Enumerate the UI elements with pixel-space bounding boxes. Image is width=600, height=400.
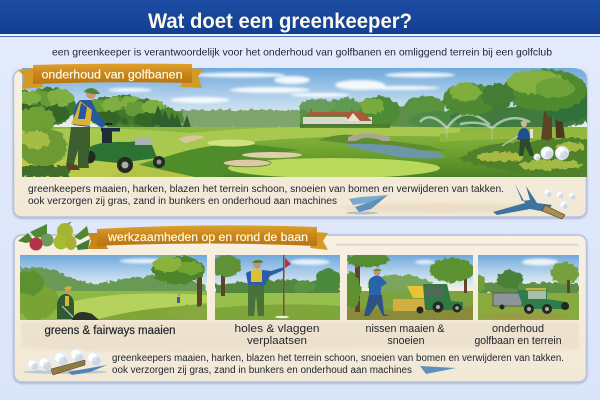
- clubhouse: [303, 109, 372, 124]
- right-hand trees: [442, 69, 594, 141]
- caption: ditches: snoeien: [388, 335, 424, 347]
- ribbon: werkzaamheden: [88, 225, 328, 250]
- fairways: [22, 126, 590, 178]
- utility vehicle with trailer: [493, 288, 569, 314]
- figure: [246, 260, 284, 316]
- caption: holes and flags: [234, 323, 320, 347]
- mower: [82, 124, 165, 173]
- image: ditch mowing and pruning: [339, 253, 474, 320]
- boulders: [534, 146, 569, 160]
- caption: maintenance: onderhoud: [492, 323, 544, 335]
- description text: [112, 353, 564, 376]
- ribbon: onderhoud van golfbanen: onderhoud van golfbanen: [42, 70, 182, 82]
- left trees: [22, 86, 76, 133]
- panel: onderhoud van golfbanen: [2, 64, 594, 219]
- panel background: [14, 70, 586, 217]
- panel background: [14, 235, 586, 382]
- caption: maintenance: golfbaan en terrein: [474, 335, 562, 347]
- shrubs lower right: [458, 137, 587, 172]
- image: holes and flags: [211, 255, 341, 320]
- sprinklers: [420, 114, 530, 140]
- caption: ditches: nissen maaien &: [366, 323, 445, 335]
- sand strip under illustration: [340, 203, 540, 213]
- description text: ook verzorgen zij gras, zand in bunkers en onderhoud aan machines: [112, 365, 412, 376]
- header banner: [0, 0, 600, 37]
- pond and bridge: [318, 134, 445, 158]
- title: Wat doet een greenkeeper?: [148, 10, 412, 33]
- bush left: [19, 127, 70, 177]
- icon: hand shovels: [346, 195, 388, 214]
- ribbon: onderhoud van golfbanen: [18, 64, 203, 89]
- icon: fork and golf balls: [493, 184, 576, 219]
- description text: greenkeepers maaien, harken, blazen het terrein schoon, snoeien van bomen en verwijderen van takken.: [28, 184, 504, 195]
- icon: fruit and leaves: [18, 222, 90, 250]
- description text: ook verzorgen zij gras, zand in bunkers en onderhoud aan machines: [28, 196, 337, 207]
- distant treeline: [90, 94, 587, 127]
- caption: ditches: [366, 323, 445, 347]
- tractor with trailer: [393, 284, 463, 314]
- flag: [275, 255, 291, 318]
- caption: greens and fairways: greens & fairways maaien: [44, 325, 176, 337]
- description text: greenkeepers maaien, harken, blazen het terrein schoon, snoeien van bomen en verwijderen van takken.: [112, 353, 564, 364]
- golfer with ride-on mower: [66, 88, 165, 173]
- caption: maintenance: [474, 323, 562, 347]
- intro text: een greenkeeper is verantwoordelijk voor het onderhoud van golfbanen en omliggend terrein bij een golfclub: [52, 48, 552, 58]
- ribbon: werkzaamheden: werkzaamheden op en rond de baan: [107, 230, 308, 244]
- worker with sprayer: [502, 120, 534, 156]
- caption: holes and flags: verplaatsen: [247, 335, 307, 347]
- image: course and grounds maintenance: [475, 255, 579, 320]
- panel: werkzaamheden op en rond de baan: [14, 222, 586, 382]
- figure: [364, 268, 390, 316]
- icon: golf balls and tools: [23, 348, 107, 375]
- image: greens and fairways mowing: [14, 255, 219, 320]
- caption: holes and flags: holes & vlaggen: [234, 323, 320, 335]
- caption labels: [44, 323, 562, 347]
- icon: wedge tool: [420, 366, 456, 374]
- description text: [28, 184, 504, 207]
- illustration: golf course panorama: [2, 68, 594, 178]
- mower figure: [57, 286, 99, 320]
